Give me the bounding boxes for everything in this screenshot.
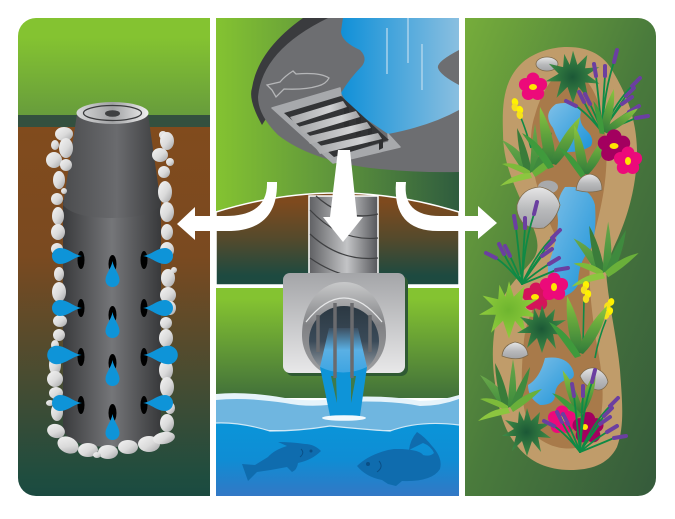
garden bed: [493, 47, 637, 470]
pond lower: [528, 357, 574, 405]
panel: storm drain and outfall: [216, 18, 459, 496]
star plant top: [546, 51, 599, 103]
green ground top: [216, 18, 459, 218]
panel: rain garden: [465, 18, 656, 496]
broad grass centre lower: [549, 296, 607, 358]
rock left: [502, 342, 528, 359]
garden inner basin: [522, 70, 607, 449]
water droplets: [47, 248, 178, 440]
yellow spikes: [581, 281, 617, 358]
soil cross-section: [216, 193, 459, 285]
star plant bright: [479, 281, 538, 339]
broad grass right: [559, 125, 608, 178]
white panel gutters: [210, 18, 465, 496]
rock right: [580, 368, 608, 390]
grass clump left: [500, 124, 564, 186]
green bank: [216, 288, 459, 398]
flower pink top-left: [519, 72, 547, 100]
yellow spike top-left: [509, 96, 531, 148]
broad grass centre: [522, 107, 580, 169]
outfall rim: [306, 298, 382, 322]
rock centre: [576, 174, 602, 192]
lavender top right: [566, 50, 648, 132]
flower crimson: [522, 282, 550, 310]
star plant lower: [502, 408, 551, 456]
paved surface edge: [251, 18, 330, 125]
paved surface: [258, 18, 459, 172]
shallow water: [216, 394, 459, 430]
flow inside pipe: [320, 328, 367, 372]
broad grass top right: [582, 83, 641, 144]
soil: [18, 127, 210, 496]
waterfall: [320, 367, 367, 416]
arrow: down into pipe: [323, 150, 363, 242]
pond middle: [548, 187, 595, 297]
fish: right: [357, 432, 441, 486]
broad grass lower: [548, 365, 603, 421]
flowers lower: [548, 406, 604, 442]
flower pink: [540, 272, 568, 300]
pond upper: [548, 103, 592, 152]
fish: left: [242, 442, 321, 481]
deep water crest: [216, 423, 459, 431]
perforation slots: [78, 251, 148, 422]
rock top: [536, 57, 558, 71]
rain streaks: [387, 18, 422, 90]
panel: infiltration drywell: [18, 18, 210, 496]
deep water: [216, 423, 459, 496]
flower magenta: [598, 129, 630, 161]
big boulder: [517, 187, 560, 228]
outfall plate face: [283, 273, 405, 373]
outfall plate: [286, 276, 408, 376]
panel background: [465, 18, 656, 496]
drywell cone: [63, 114, 161, 218]
lavender left: [486, 202, 568, 284]
arrow: left to drywell: [177, 182, 277, 240]
pebble backfill: [45, 127, 177, 459]
lavender lower: [544, 370, 626, 452]
grass clump lower left: [478, 359, 542, 421]
sky and grass band: [18, 18, 210, 116]
arrow: right to rain garden: [396, 182, 497, 239]
splash foam: [322, 415, 366, 421]
vertical pipe: [309, 196, 378, 276]
puddle: [341, 18, 459, 134]
drywell cap: [76, 102, 148, 124]
drywell lower cylinder: [63, 200, 161, 447]
rock small behind: [538, 180, 558, 194]
divider band: [216, 285, 459, 288]
grass clump mid right: [571, 222, 639, 287]
surface foam: [216, 393, 459, 406]
fish stencil: [267, 71, 329, 97]
star plant dark: [517, 305, 566, 353]
grate: [272, 88, 400, 163]
turf strip: [18, 115, 210, 128]
flower pink right: [614, 146, 642, 174]
waterfall notches: [331, 376, 356, 403]
outfall opening: [309, 306, 379, 376]
trash rack bars: [318, 303, 370, 378]
outfall hood: [302, 282, 386, 378]
